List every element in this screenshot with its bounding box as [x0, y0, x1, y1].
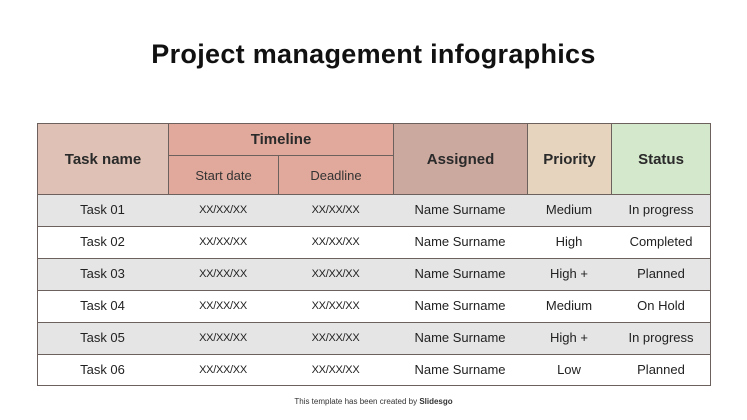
header: timeline	[168, 123, 394, 156]
header: deadline: Deadline	[310, 168, 362, 182]
table: XX/XX/XX	[199, 300, 247, 312]
header: status: Status	[638, 150, 684, 168]
table: Medium	[546, 202, 592, 217]
table: Planned	[637, 266, 685, 281]
header: task name	[37, 123, 169, 195]
header: assigned	[393, 123, 528, 195]
table: Task 03	[80, 266, 125, 281]
table: Task 06	[80, 362, 125, 377]
table: Completed	[630, 234, 692, 249]
table: XX/XX/XX	[312, 300, 359, 312]
table: Name Surname	[414, 362, 506, 377]
table: XX/XX/XX	[199, 332, 247, 344]
header: status	[611, 123, 711, 195]
table: Task 02	[80, 234, 125, 249]
table: Name Surname	[414, 202, 506, 217]
table: XX/XX/XX	[199, 364, 247, 376]
header: priority: Priority	[543, 150, 596, 168]
table: Name Surname	[414, 298, 506, 313]
header: start date: Start date	[195, 168, 252, 182]
title: Project management infographics	[151, 39, 596, 69]
table: Medium	[546, 298, 592, 313]
table: In progress	[628, 330, 694, 345]
table: High	[556, 234, 582, 249]
header: priority	[527, 123, 612, 195]
table: High +	[550, 330, 588, 345]
table: Task 04	[80, 298, 125, 313]
header: deadline	[278, 155, 394, 195]
header: task name: Task name	[65, 150, 141, 168]
header: timeline: Timeline	[251, 131, 311, 148]
table: High +	[550, 266, 588, 281]
table: In progress	[628, 202, 694, 217]
table: On Hold	[637, 298, 685, 313]
table: Name Surname	[414, 330, 506, 345]
footer credit: This template has been created by Slidesgo	[294, 397, 453, 406]
table: Name Surname	[414, 266, 506, 281]
table: Task 01	[80, 202, 125, 217]
table: XX/XX/XX	[312, 364, 359, 376]
table: XX/XX/XX	[312, 236, 359, 248]
table: XX/XX/XX	[199, 268, 247, 280]
rows	[37, 194, 711, 386]
table: Planned	[637, 362, 685, 377]
table: XX/XX/XX	[312, 204, 359, 216]
table: Name Surname	[414, 234, 506, 249]
table: Task 05	[80, 330, 125, 345]
header: start date	[168, 155, 279, 195]
header: assigned: Assigned	[427, 150, 494, 168]
table: XX/XX/XX	[199, 236, 247, 248]
table: Low	[557, 362, 581, 377]
table: XX/XX/XX	[312, 268, 359, 280]
table: XX/XX/XX	[312, 332, 359, 344]
table: XX/XX/XX	[199, 204, 247, 216]
